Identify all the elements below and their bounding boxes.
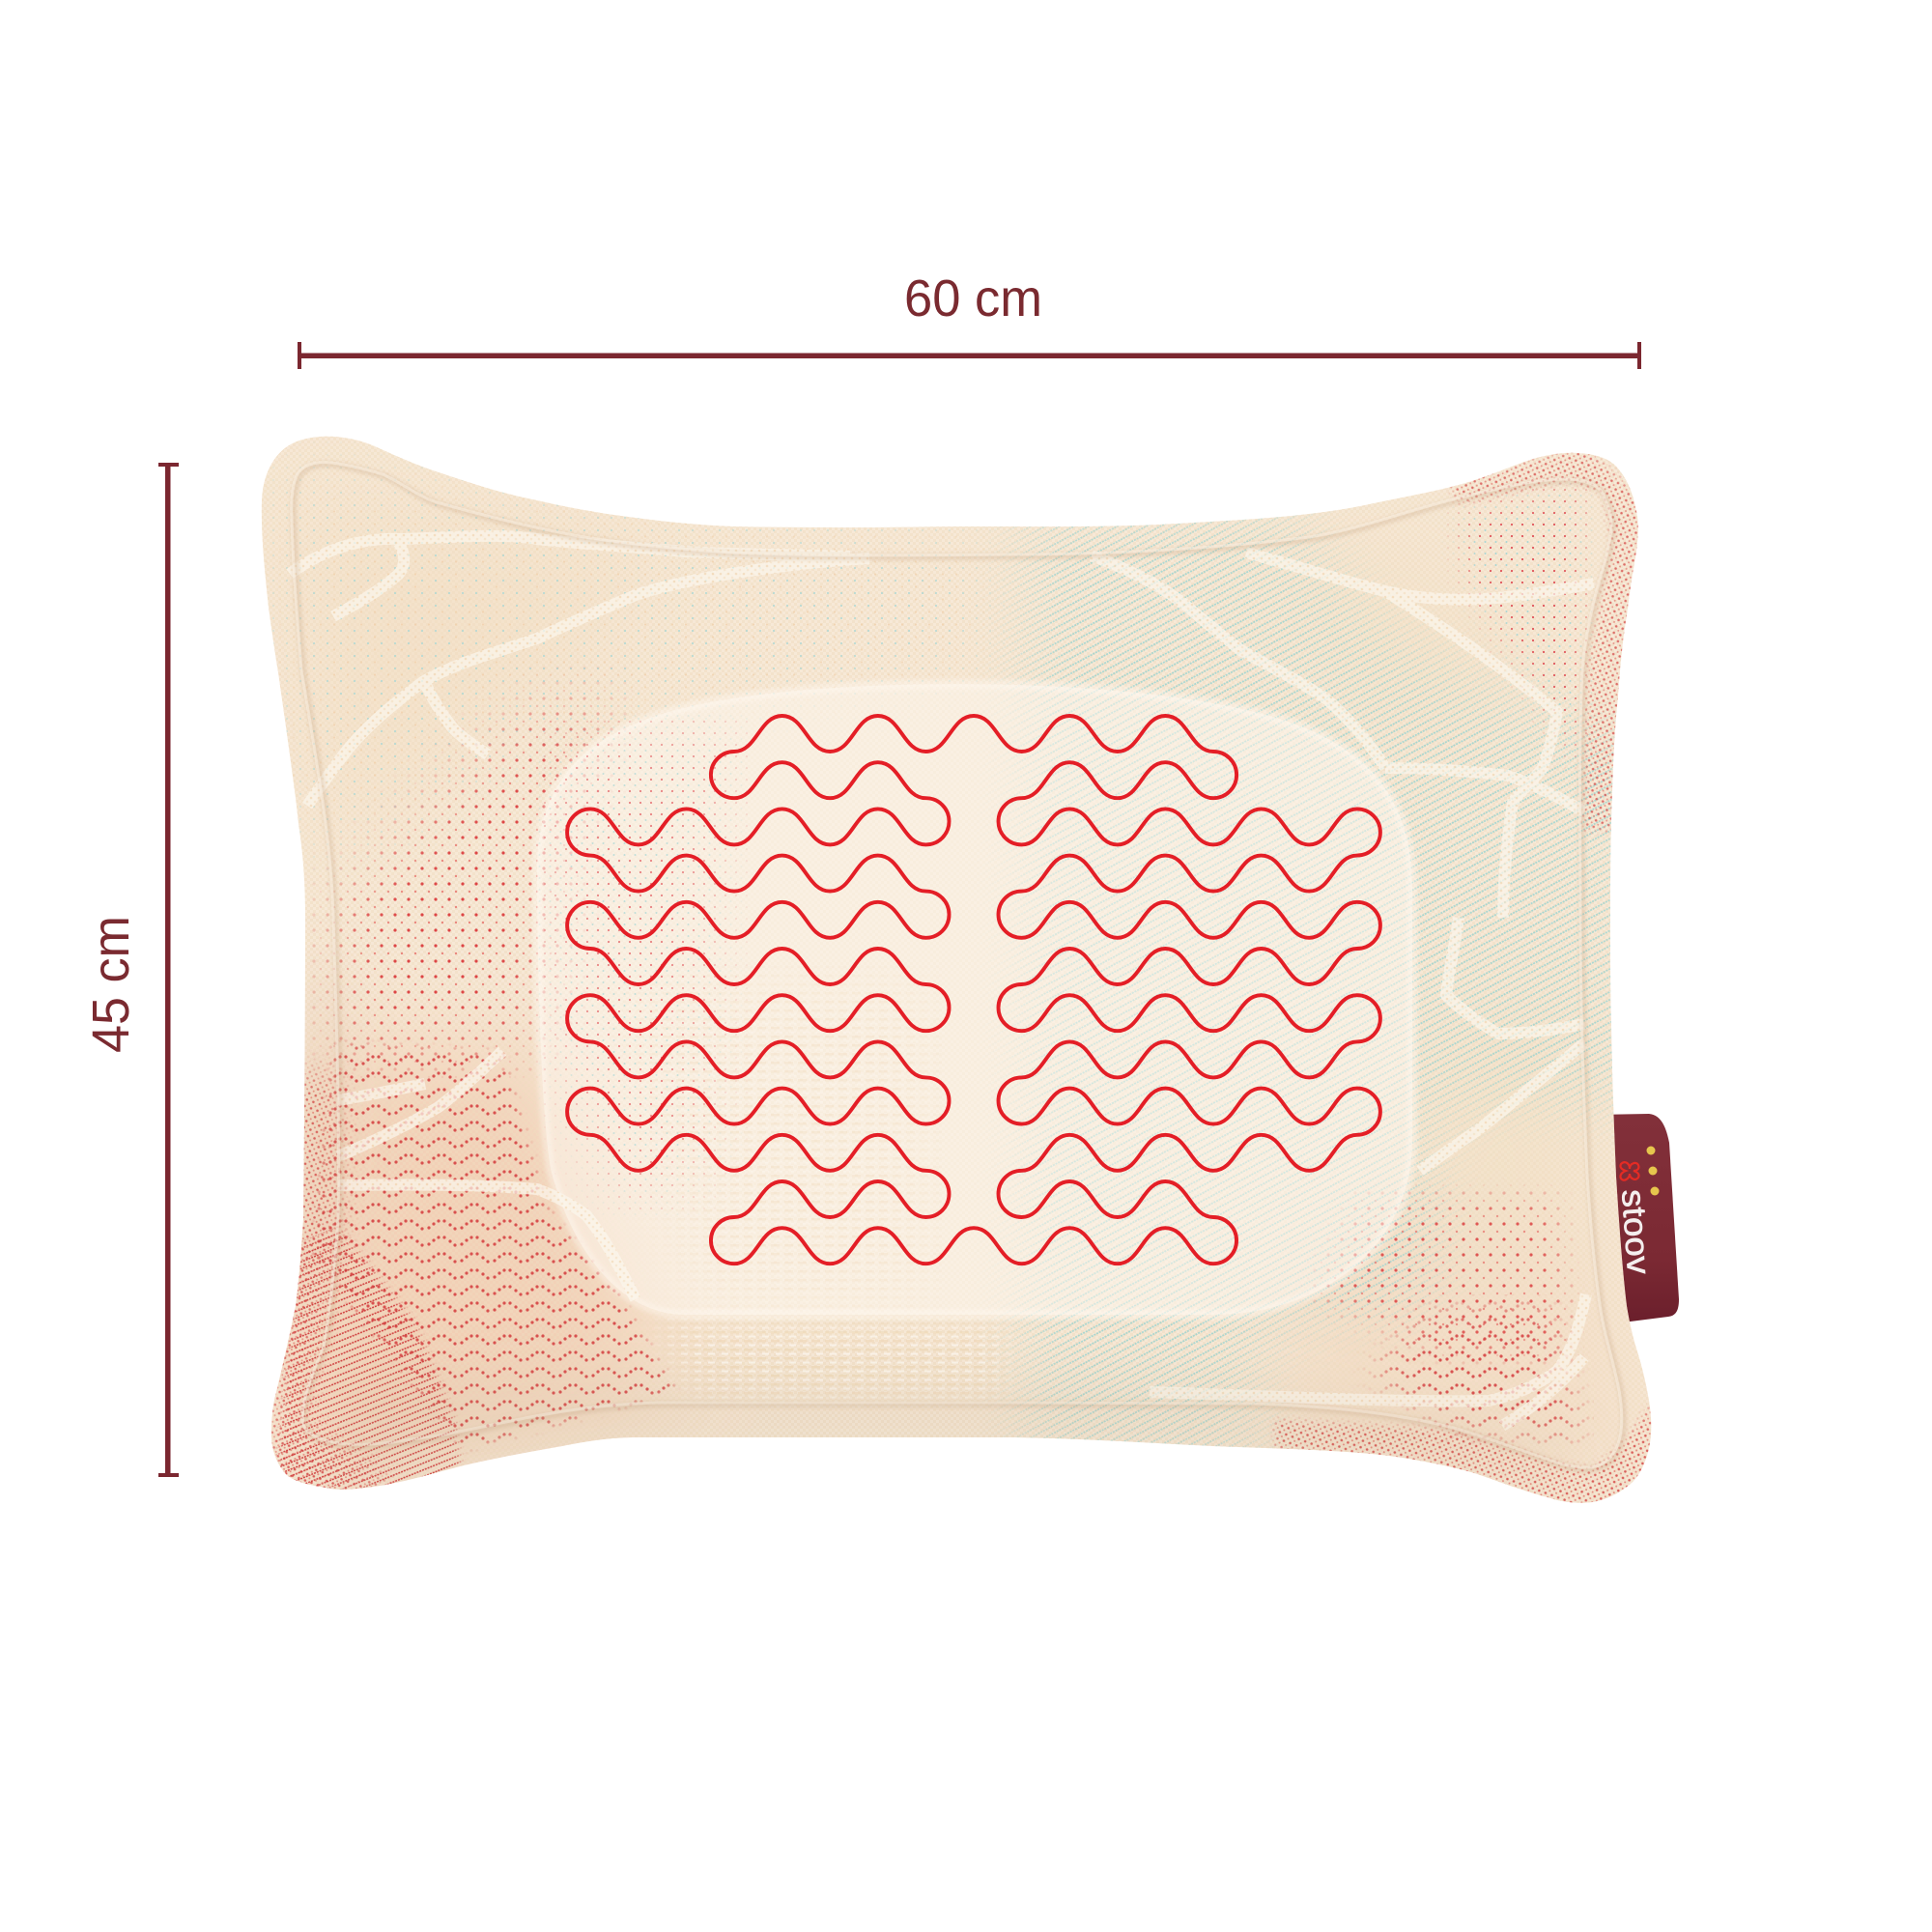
pillow xyxy=(251,425,1662,1517)
height dimension: 45 cm xyxy=(82,463,179,1477)
bottom woven band xyxy=(638,1309,1024,1410)
piping seam shading xyxy=(292,463,1624,1469)
red piping: left side xyxy=(271,1053,406,1490)
red dot zone: lower right xyxy=(1314,1179,1584,1364)
soft shadows xyxy=(270,966,1584,1497)
central lighter panel xyxy=(537,684,1412,1315)
white vein lines xyxy=(290,536,1594,1426)
heating element: serpentine red line xyxy=(567,716,1380,1264)
fabric colour zones xyxy=(251,425,1662,1517)
red dots: upper right xyxy=(1447,477,1592,769)
width dimension: 60 cm xyxy=(298,270,1641,369)
width dimension: 60 cm: 60 cm xyxy=(904,270,1042,327)
red scale pattern: lower left xyxy=(311,1039,680,1453)
red piping: upper right xyxy=(1447,452,1638,837)
sparse dot texture xyxy=(266,454,1018,881)
red scale pattern: lower right xyxy=(1352,1294,1594,1449)
red piping and stripes: lower right xyxy=(1270,1404,1652,1503)
red dot zone: left xyxy=(309,657,638,1082)
red stripes: corner xyxy=(273,1225,466,1490)
teal stripe zones xyxy=(987,514,1615,1448)
height dimension: 45 cm: 45 cm xyxy=(82,916,140,1053)
brand tag: stoov xyxy=(1614,1188,1657,1275)
brand tag xyxy=(1594,1114,1679,1322)
